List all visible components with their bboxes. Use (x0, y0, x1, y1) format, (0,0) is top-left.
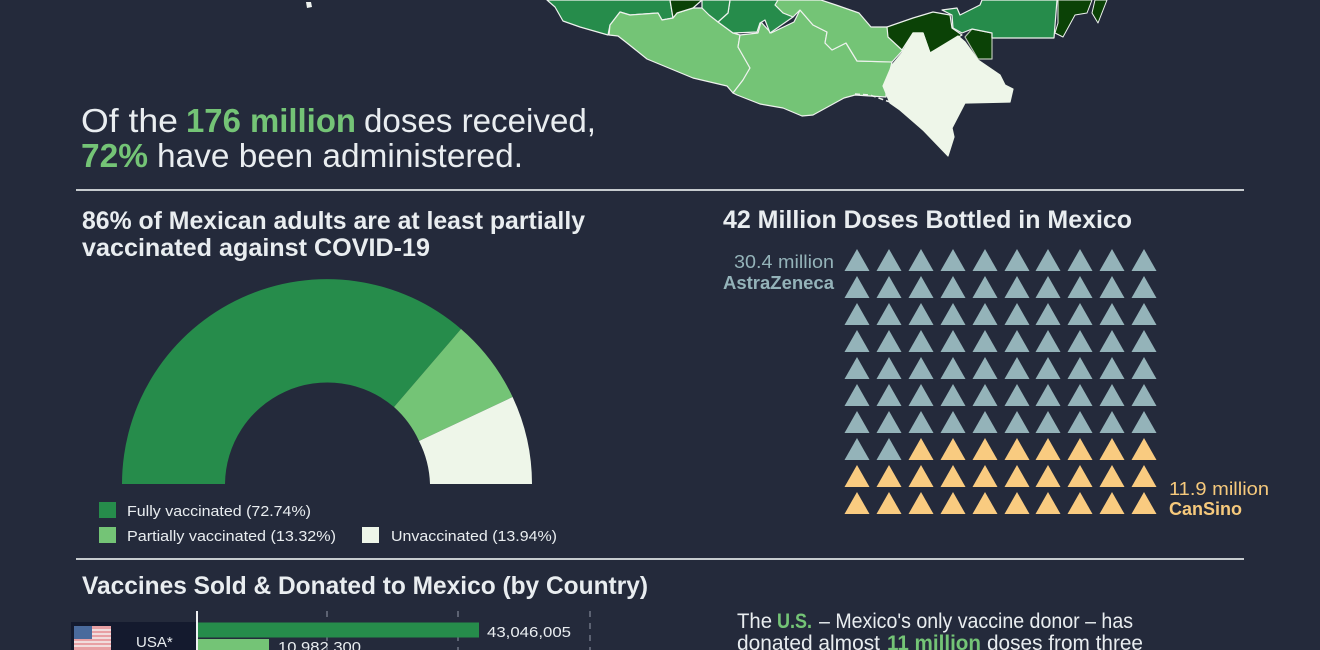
headline: doses received and administered: 176 million (186, 102, 356, 139)
headline: doses received and administered: have been administered. (157, 137, 523, 174)
label: CanSino doses (1169, 479, 1269, 519)
bar: USA donated (198, 639, 269, 650)
legend: vaccination status: Fully vaccinated (72.74%) (127, 503, 311, 520)
label: AstraZeneca doses: AstraZeneca (723, 273, 835, 293)
bar chart: vaccines by country (71, 611, 590, 650)
waffle chart: triangles for doses by manufacturer (844, 249, 1156, 514)
label: CanSino doses: CanSino (1169, 499, 1242, 519)
bar: USA purchased (198, 622, 479, 638)
heading: doses bottled in Mexico: 42 Million Doses Bottled in Mexico (723, 206, 1132, 234)
heading: vaccines sold and donated: Vaccines Sold & Donated to Mexico (by Country) (82, 572, 648, 600)
label: AstraZeneca doses (723, 252, 835, 293)
text block: U.S. donations (737, 610, 1143, 650)
text block: U.S. donations: – Mexico's only vaccine donor – has (819, 610, 1133, 633)
half-donut chart: vaccination status (122, 279, 532, 484)
label: CanSino doses: 11.9 million (1169, 479, 1269, 499)
value: USA purchased: 43,046,005 (487, 624, 571, 641)
row label: USA (71, 622, 196, 650)
legend: vaccination status: Partially vaccinated (13.32%) (127, 528, 336, 545)
heading: share of adults vaccinated: vaccinated against COVID-19 (82, 234, 430, 262)
label: AstraZeneca doses: 30.4 million (734, 252, 834, 272)
headline: doses received and administered (81, 102, 596, 174)
text block: U.S. donations: The (737, 610, 772, 633)
legend: vaccination status: Unvaccinated (13.94%) (391, 528, 557, 545)
text block: U.S. donations: U.S. (777, 610, 812, 633)
heading: share of adults vaccinated (82, 207, 585, 262)
map: southern Mexico states by vaccination level (306, 0, 1107, 156)
headline: doses received and administered: Of the (81, 102, 178, 139)
headline: doses received and administered: doses received, (364, 102, 596, 139)
legend: vaccination status (99, 502, 557, 545)
headline: doses received and administered: 72% (81, 137, 148, 174)
heading: share of adults vaccinated: 86% of Mexican adults are at least partially (82, 207, 585, 235)
